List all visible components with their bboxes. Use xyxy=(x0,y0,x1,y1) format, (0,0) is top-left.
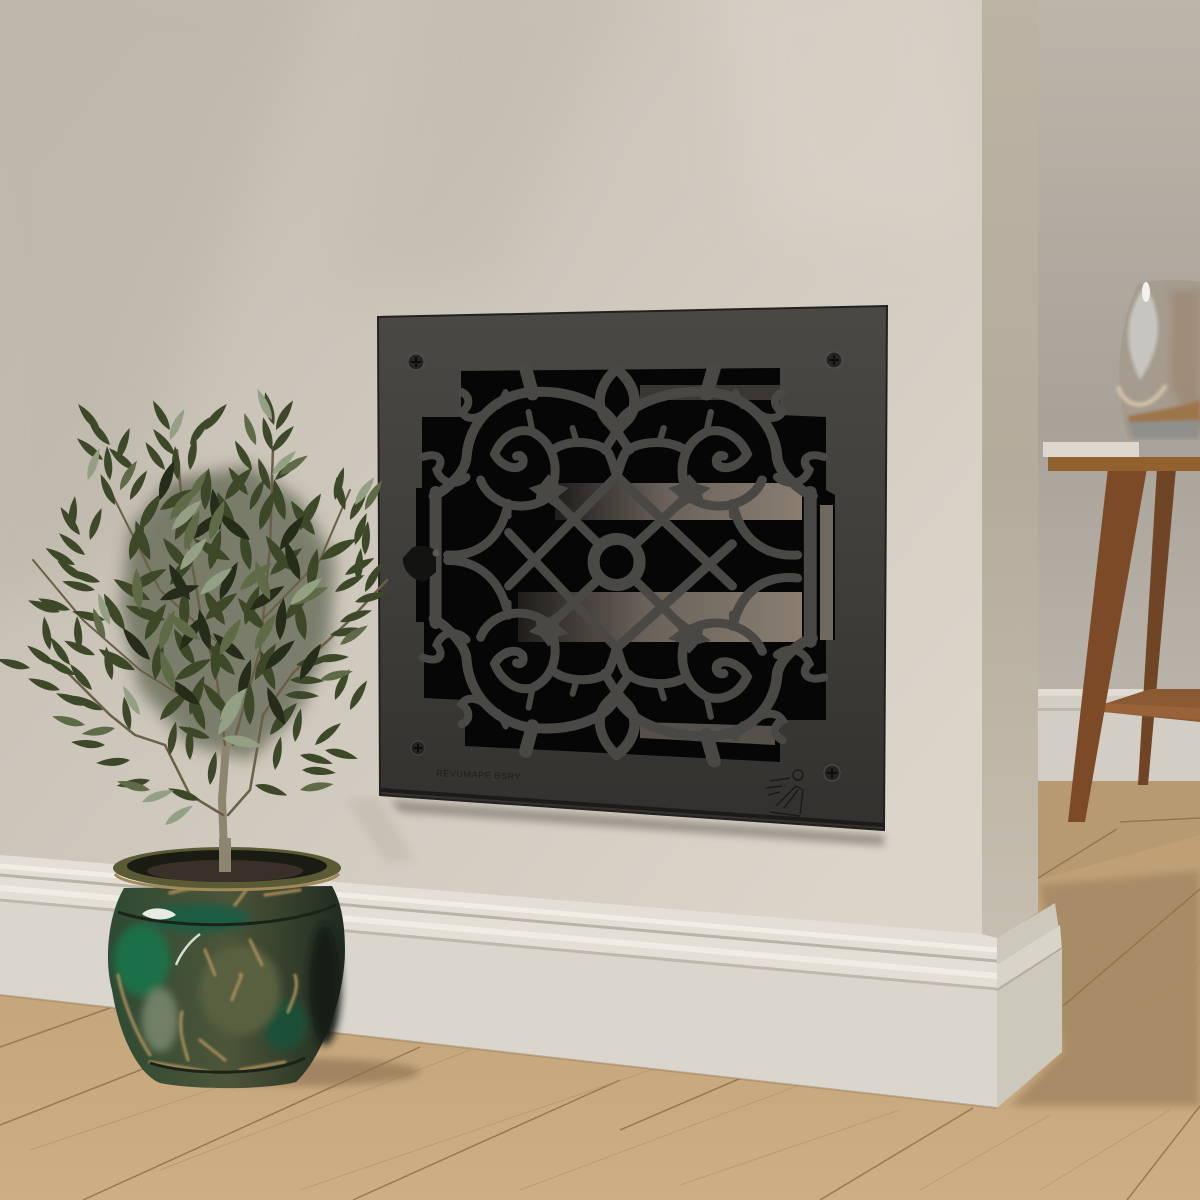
center ring xyxy=(594,539,640,585)
main wall xyxy=(0,0,985,942)
branches xyxy=(33,447,387,875)
glaze patches xyxy=(114,904,341,1052)
pot rim xyxy=(113,847,341,889)
screw: bottom right xyxy=(824,765,840,781)
screw: top right xyxy=(826,352,842,368)
mid green leaves xyxy=(51,412,385,794)
pot highlights xyxy=(142,908,176,919)
soil xyxy=(147,860,303,882)
floor grain xyxy=(30,900,1200,1190)
pale leaves xyxy=(84,388,377,828)
screw: bottom left xyxy=(411,741,425,755)
baseboard moulding xyxy=(0,855,997,990)
damper knob xyxy=(403,545,440,582)
grille shadow xyxy=(390,800,884,846)
floor xyxy=(0,781,1200,1200)
scrollwork lower right xyxy=(617,538,824,766)
pillar side face xyxy=(982,0,1038,940)
pot shadow xyxy=(180,1058,420,1086)
table back leg xyxy=(1138,468,1176,785)
grille scrollwork xyxy=(423,368,824,766)
floor shadow under baseboard xyxy=(0,995,997,1108)
vase xyxy=(1118,280,1200,440)
scrollwork upper right xyxy=(617,368,824,586)
floor shadow beside pillar xyxy=(1010,781,1200,1106)
scrollwork lower left xyxy=(423,528,617,756)
baseboard return xyxy=(997,903,1062,1108)
table wood edge xyxy=(1048,457,1200,471)
vent grille xyxy=(378,306,887,830)
grille opening xyxy=(416,368,835,762)
table xyxy=(1043,442,1200,822)
plant shadow on wall xyxy=(345,798,415,862)
wall soft shadows xyxy=(0,0,970,620)
pot body xyxy=(108,886,345,1088)
table shelf xyxy=(1104,689,1200,722)
maker text: REVUMAPE BSRY xyxy=(436,768,521,782)
grille plate xyxy=(378,306,887,830)
background wall xyxy=(1038,0,1200,700)
baseboard flat xyxy=(0,900,997,1108)
louver slats xyxy=(518,385,833,745)
scrollwork upper left xyxy=(423,368,617,586)
olive tree xyxy=(0,388,389,875)
deep shadow leaves xyxy=(118,458,325,728)
pot shoulder lines xyxy=(118,905,336,925)
maker emblem xyxy=(766,770,803,816)
tan streaks xyxy=(118,885,300,1072)
table top xyxy=(1043,442,1139,457)
background baseboard xyxy=(1038,689,1200,783)
floor planks xyxy=(0,818,1200,1200)
dark leaves xyxy=(0,391,389,804)
trunk base xyxy=(219,838,231,872)
screw: top left xyxy=(408,354,424,370)
main baseboard xyxy=(0,855,1062,1108)
foliage mass xyxy=(120,465,335,760)
glazed pot xyxy=(108,838,345,1088)
table front leg xyxy=(1068,468,1147,822)
